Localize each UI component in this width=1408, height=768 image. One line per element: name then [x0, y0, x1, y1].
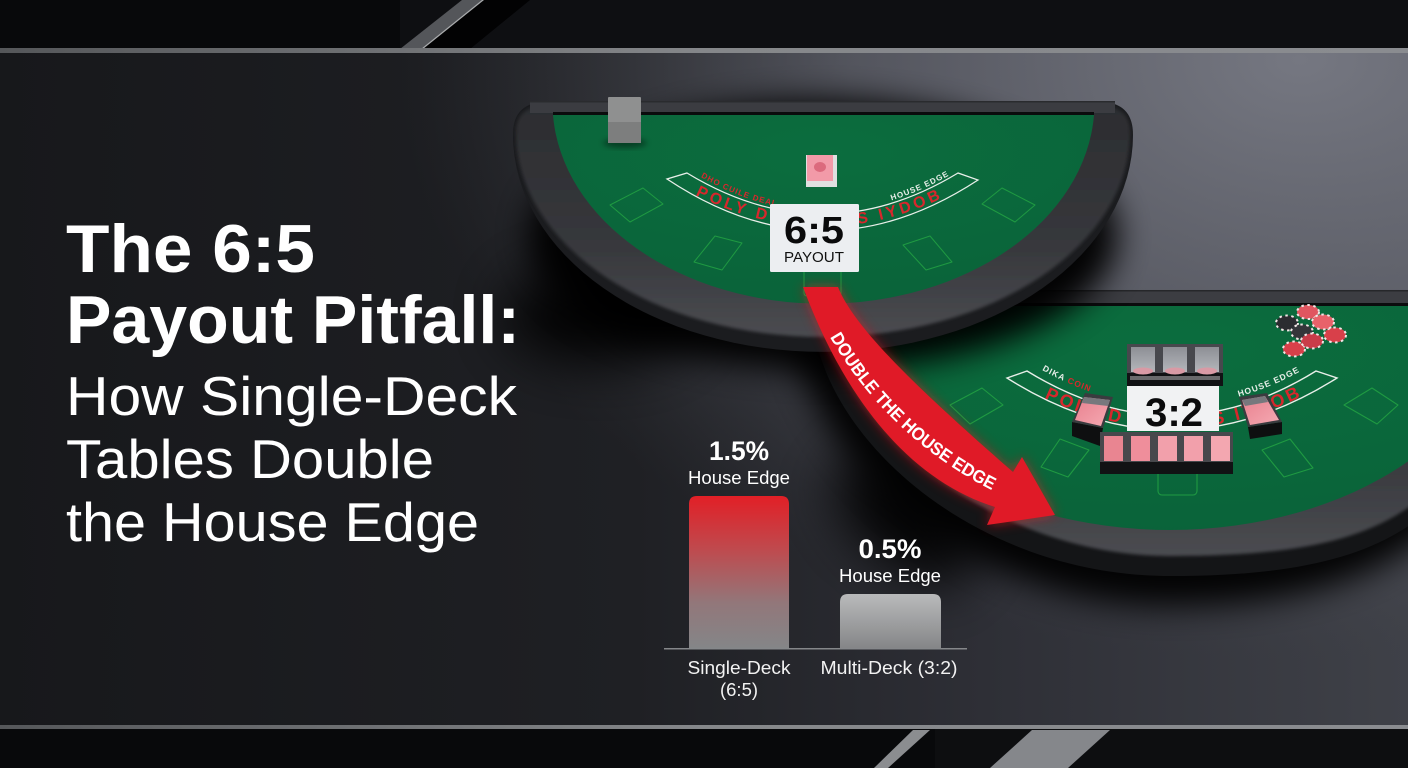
arc lettering: DIKA COIN	[1042, 365, 1091, 392]
table shadow	[790, 352, 1408, 623]
axis labels	[688, 658, 958, 700]
felt	[553, 115, 1094, 304]
value: 1.5%: House Edge	[688, 468, 790, 488]
arc lettering: S IYDOB	[859, 190, 940, 224]
arrow body	[803, 287, 1055, 525]
right card stack	[1239, 393, 1282, 439]
arc lettering	[696, 171, 948, 224]
ratio: 6:5	[784, 210, 844, 252]
single deck card	[806, 155, 837, 187]
arc lettering: POLY D	[696, 186, 767, 220]
bottom decorative band	[0, 729, 1408, 768]
axis	[664, 648, 967, 650]
betting spots	[950, 388, 1398, 495]
left card stack	[1072, 393, 1113, 446]
betting spots	[610, 188, 1035, 296]
value: 0.5%: House Edge	[839, 566, 941, 586]
axis labels: Single-Deck	[688, 658, 792, 678]
payout card 6:5	[770, 204, 859, 272]
axis labels: Multi-Deck (3:2)	[820, 658, 958, 678]
value: 0.5%	[839, 534, 941, 586]
bar chart	[664, 436, 967, 700]
table: multi-deck 3:2	[790, 290, 1408, 623]
felt	[839, 305, 1408, 530]
betting arc	[667, 173, 978, 231]
table shadow	[505, 100, 1118, 370]
card stacks: bottom row	[1100, 432, 1233, 474]
arc lettering: HOUSE EDGE	[1238, 366, 1300, 396]
subtitle line 2: Tables Double	[66, 428, 434, 490]
payout card 3:2: 3:2	[1145, 391, 1203, 435]
arc lettering: S IYDOB	[1219, 388, 1299, 424]
table rim	[812, 290, 1408, 576]
arrow: double the house edge	[797, 278, 1060, 532]
value: 1.5%: 1.5%	[709, 436, 769, 466]
deck block	[603, 97, 647, 148]
arc lettering: HOUSE EDGE	[890, 171, 948, 200]
value: 0.5%: 0.5%	[858, 534, 922, 564]
payout label: PAYOUT	[784, 250, 844, 266]
arrow label: DOUBLE THE HOUSE EDGE	[830, 332, 997, 490]
table rim	[513, 101, 1133, 352]
betting arc	[1007, 371, 1337, 430]
arrow glow	[803, 287, 1055, 525]
title line: Payout Pitfall: Payout Pitfall:	[66, 282, 520, 358]
arc lettering: POLY D	[1045, 387, 1121, 422]
arc lettering	[1042, 365, 1300, 424]
title line: The 6:5: The 6:5	[66, 211, 315, 287]
table: single-deck 6:5	[496, 80, 1138, 384]
arc lettering: DHO CUILE DEAL	[701, 172, 774, 205]
axis labels: (6:5)	[720, 680, 758, 700]
payout card 3:2	[1127, 386, 1219, 435]
value: 1.5%	[688, 436, 790, 488]
subtitle line 1: How Single-Deck	[66, 365, 518, 427]
title	[66, 211, 520, 553]
subtitle line 3: the House Edge	[66, 491, 479, 553]
bar: multi-deck	[840, 594, 941, 649]
chips	[1276, 305, 1346, 356]
top decorative band	[0, 0, 1408, 49]
shoes: top row	[1127, 344, 1223, 386]
bar: single-deck	[689, 496, 789, 649]
